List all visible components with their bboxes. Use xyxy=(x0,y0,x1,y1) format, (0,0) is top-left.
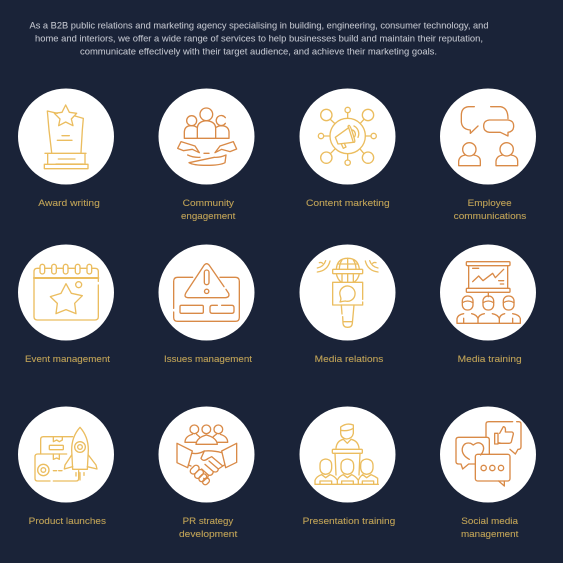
label: Media relations xyxy=(315,354,384,365)
icon: audience with chart board xyxy=(457,262,520,323)
panel: issues management xyxy=(158,244,254,365)
label: Media training xyxy=(458,354,522,365)
label: Product launches xyxy=(29,516,106,527)
label: Issues management xyxy=(164,354,252,365)
panel: employee communications xyxy=(440,88,536,222)
label: Content marketing xyxy=(306,198,390,209)
label xyxy=(461,516,519,540)
panel: event management xyxy=(18,244,114,365)
label: communications xyxy=(454,211,527,222)
icon: reporter microphone xyxy=(317,258,378,327)
intro text xyxy=(30,20,488,58)
panel: PR strategy development xyxy=(158,406,254,540)
label: Award writing xyxy=(38,198,100,209)
panel: community engagement xyxy=(158,88,254,222)
label: management xyxy=(461,529,519,540)
icon: social speech bubbles xyxy=(456,422,521,486)
label: Presentation training xyxy=(303,516,395,527)
label: engagement xyxy=(181,211,236,222)
icon: boxes and rocket xyxy=(35,427,97,481)
icon: megaphone network xyxy=(318,107,376,165)
label: Employee xyxy=(468,198,512,209)
label: Social media xyxy=(461,516,519,527)
icon: community group and ribbon xyxy=(178,108,237,165)
panel: media relations xyxy=(300,244,396,365)
icon: trophy xyxy=(44,105,88,169)
icon: two people talking xyxy=(459,107,518,166)
label xyxy=(454,198,527,222)
label: Event management xyxy=(25,354,110,365)
label: development xyxy=(179,529,238,540)
label xyxy=(179,516,238,540)
intro text: As a B2B public relations and marketing agency specialising in building, engineering, consumer technology, and xyxy=(30,20,488,32)
icon: speaker at podium with audience xyxy=(315,424,378,484)
icon: calendar with star xyxy=(34,264,98,320)
label: PR strategy xyxy=(183,516,234,527)
intro text: communicate effectively with their target audience, and achieve their marketing goals. xyxy=(80,46,437,58)
label xyxy=(181,198,236,222)
icon: warning sign panel xyxy=(174,264,239,321)
panel: content marketing xyxy=(300,88,396,209)
panel: product launches xyxy=(18,406,114,527)
panel: social media management xyxy=(440,406,536,540)
panel: media training xyxy=(440,244,536,365)
panel: presentation training xyxy=(300,406,396,527)
label: Community xyxy=(183,198,234,209)
panel: award writing xyxy=(18,88,114,209)
icon: handshake and team xyxy=(177,425,237,486)
intro text: home and interiors, we offer a wide range of services to help businesses build and maintain their reputation, xyxy=(35,34,483,44)
